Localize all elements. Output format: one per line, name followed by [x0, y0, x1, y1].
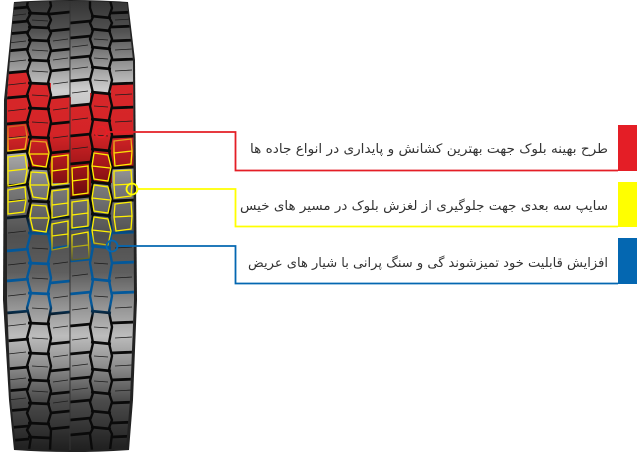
blue connector and box	[118, 246, 618, 284]
red zone blocks	[6, 72, 135, 197]
blue caption: افزایش قابلیت خود تمیزشوند گی و سنگ پرانی با شیار های عریض	[248, 255, 608, 271]
lateral grooves	[6, 7, 29, 441]
callout: yellow, 3D sipes	[126, 182, 637, 227]
tire	[0, 0, 140, 454]
blue marker circle	[106, 240, 118, 252]
block sipes	[8, 14, 132, 403]
blue swatch	[618, 238, 637, 284]
centre groove	[70, 8, 71, 450]
callout: blue, wide grooves	[106, 238, 637, 284]
callout: red, block design	[96, 125, 637, 171]
tire silhouette	[3, 0, 137, 452]
red marker circle	[96, 126, 106, 138]
red connector and box	[106, 132, 618, 170]
yellow sipe outlines	[8, 125, 132, 260]
yellow caption: سایپ سه بعدی جهت جلوگیری از لغزش بلوک در مسیر های خیس	[240, 198, 608, 214]
tread blocks	[7, 1, 134, 450]
yellow marker circle	[126, 184, 138, 194]
red caption: طرح بهینه بلوک جهت بهترین کشانش و پایداری در انواع جاده ها	[250, 142, 608, 157]
tread grooves	[6, 0, 136, 450]
yellow swatch	[618, 182, 637, 227]
red swatch	[618, 125, 637, 171]
yellow connector and box	[138, 189, 618, 226]
